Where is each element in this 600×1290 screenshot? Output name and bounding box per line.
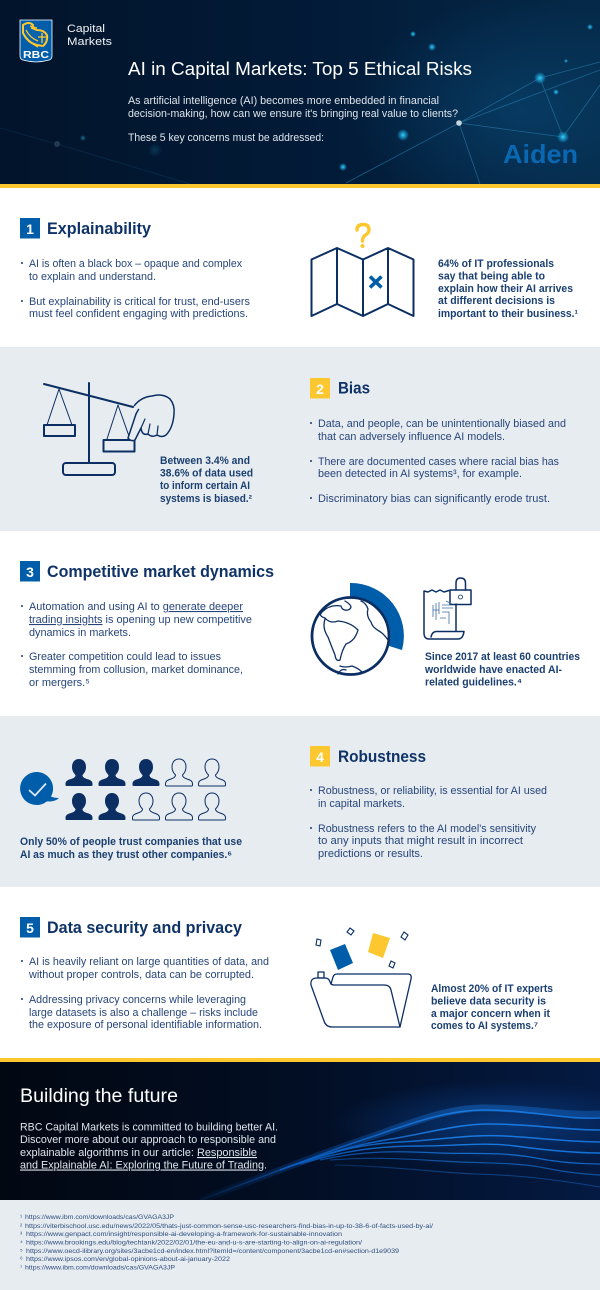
- bullets: competitive dynamics: [21, 601, 252, 689]
- bullets: explainability: must feel confident engaging with predictions.: [29, 308, 248, 320]
- bullets: explainability: AI is often a black box – opaque and complex: [29, 258, 242, 270]
- bullets: competitive dynamics: Automation and using AI to generate deeper: [29, 601, 243, 613]
- wave graphic: [200, 1108, 600, 1200]
- stat: 64%: explain how their AI arrives: [438, 283, 573, 295]
- bullets: data security: large datasets is also a challenge – risks include: [29, 1007, 258, 1019]
- bullets: robustness: Robustness refers to the AI model's sensitivity: [318, 823, 536, 835]
- yellow divider: [0, 184, 600, 188]
- bullets: bias: Data, and people, can be unintentionally biased and: [318, 418, 566, 430]
- footnote list: ⁶: [20, 1256, 23, 1263]
- bullets: robustness: to any inputs that might result in incorrect: [318, 835, 523, 847]
- bullets: robustness: in capital markets.: [318, 798, 405, 810]
- bullets: explainability: to explain and understand.: [29, 271, 156, 283]
- heading: 3 Competitive market dynamics: Competitive market dynamics: [47, 562, 274, 581]
- bullets: data security: without proper controls, data can be corrupted.: [28, 969, 254, 981]
- stat: 50% trust: AI as much as they trust other companies.⁶: [20, 849, 232, 861]
- stat: biased data: Between 3.4% and: [160, 455, 250, 467]
- stat: 64%: important to their business.¹: [438, 308, 578, 320]
- Aiden logo: Aiden: [503, 139, 578, 169]
- icon: globe with arc: [312, 583, 404, 674]
- panel: competitive market dynamics: [0, 531, 600, 716]
- intro text: [128, 95, 458, 144]
- stat: biased data: [160, 455, 253, 505]
- bullets: data security: AI is heavily reliant on large quantities of data, and: [29, 956, 269, 968]
- bullets: competitive dynamics: stemming from collusion, market dominance,: [29, 664, 243, 676]
- heading: 5 Data security and privacy: 5: [26, 920, 34, 936]
- body text with article link: [20, 1122, 278, 1172]
- bullets: bias: Discriminatory bias can significantly erode trust.: [318, 493, 550, 505]
- heading: 4 Robustness: Robustness: [338, 747, 426, 766]
- panel: data security and privacy: [0, 887, 600, 1058]
- icon: scales with hand: [44, 383, 174, 475]
- bullets: bias: [310, 418, 566, 505]
- footnote list: ⁷: [20, 1264, 23, 1272]
- icon: document with lock: [424, 578, 471, 639]
- body text with article link: explainable algorithms in our article: Responsible: [20, 1147, 257, 1159]
- footnote list: https://www.ibm.com/downloads/cas/GVAGA3JP: [25, 1264, 175, 1272]
- intro text: decision-making, how can we ensure it's bringing real value to clients?: [128, 108, 458, 120]
- intro text: These 5 key concerns must be addressed:: [128, 132, 324, 144]
- stat: biased data: 38.6% of data used: [160, 468, 253, 480]
- logo wordmark: Capital: [67, 23, 105, 35]
- network background: [0, 24, 600, 184]
- icon: map with question mark: [312, 224, 414, 316]
- body text with article link: Discover more about our approach to responsible and: [20, 1134, 276, 1146]
- stat: 50% trust: [20, 836, 242, 861]
- stat: 60 countries: Since 2017 at least 60 countries: [425, 651, 580, 663]
- icon: people trust chart: [66, 759, 226, 820]
- stat: 64%: say that being able to: [438, 270, 546, 282]
- footnote list: [20, 1214, 433, 1272]
- heading: 2 Bias: 2: [316, 381, 324, 397]
- stat: 64%: at different decisions is: [438, 295, 555, 307]
- heading: 4 Robustness: 4: [316, 749, 324, 765]
- bullets: bias: been detected in AI systems³, for example.: [318, 468, 522, 480]
- intro text: As artificial intelligence (AI) becomes more embedded in financial: [128, 95, 439, 107]
- heading: 3 Competitive market dynamics: 3: [26, 564, 34, 580]
- heading: 2 Bias: Bias: [338, 378, 370, 398]
- body text with article link: and Explainable AI: Exploring the Future of Trading.: [20, 1160, 267, 1172]
- bullets: data security: Addressing privacy concerns while leveraging: [29, 994, 246, 1006]
- stat: 60 countries: worldwide have enacted AI-: [424, 664, 562, 676]
- stat: 60 countries: related guidelines.⁴: [425, 676, 522, 688]
- panel: explainability: [0, 188, 600, 347]
- heading: 1 Explainability: Explainability: [47, 219, 152, 238]
- icon: speech bubble with check: [20, 772, 59, 805]
- bullets: competitive dynamics: Greater competition could lead to issues: [29, 651, 221, 663]
- bullets: bias: There are documented cases where racial bias has: [318, 456, 559, 468]
- bullets: robustness: [310, 785, 547, 860]
- panel: bias: [0, 347, 600, 531]
- panel: robustness: [0, 716, 600, 887]
- bullets: data security: the exposure of personal identifiable information.: [29, 1019, 262, 1031]
- body text with article link: RBC Capital Markets is committed to building better AI.: [20, 1122, 278, 1134]
- footnote list: ⁵: [20, 1248, 23, 1255]
- footnote list: https://www.oecd-ilibrary.org/sites/3acbe1cd-en/index.html?itemId=/content/component/3acbe1cd-en#section-d1e9039: [26, 1248, 399, 1255]
- footnote list: https://www.ipsos.com/en/global-opinions-about-ai-january-2022: [26, 1256, 230, 1263]
- logo wordmark: [67, 23, 113, 48]
- bullets: competitive dynamics: dynamics in markets.: [29, 627, 131, 639]
- heading: 5 Data security and privacy: Data security and privacy: [47, 918, 243, 937]
- footnote list: ⁴: [20, 1240, 23, 1246]
- heading: 4 Robustness: [310, 746, 426, 766]
- bullets: bias: that can adversely influence AI models.: [318, 431, 505, 443]
- stat: 20% of IT experts: believe data security is: [431, 996, 546, 1008]
- stat: 20% of IT experts: [431, 983, 553, 1032]
- footnote list: https://viterbischool.usc.edu/news/2022/05/thats-just-common-sense-usc-researchers-find-bias-in-up-to-38-6-of-facts-used-by-ai/: [25, 1223, 433, 1230]
- bullets: explainability: [21, 258, 250, 320]
- bullets: competitive dynamics: trading insights is opening up new competitive: [29, 614, 252, 626]
- panel: references: [0, 1200, 600, 1290]
- stat: 60 countries: [424, 651, 580, 688]
- stat: biased data: to inform certain AI: [160, 480, 250, 492]
- heading: Building the future: [20, 1085, 178, 1107]
- footnote list: ³: [20, 1231, 23, 1238]
- RBC logo shield: RBC: [23, 49, 49, 61]
- stat: biased data: systems is biased.²: [160, 493, 252, 505]
- RBC logo shield: [20, 20, 52, 62]
- stat: 20% of IT experts: Almost 20% of IT experts: [431, 983, 553, 995]
- stat: 64%: [438, 258, 578, 320]
- icon: folder with files: [311, 928, 411, 1027]
- bullets: robustness: Robustness, or reliability, is essential for AI used: [318, 785, 547, 797]
- logo wordmark: Markets: [67, 36, 113, 48]
- bullets: explainability: But explainability is critical for trust, end-users: [29, 296, 250, 308]
- footnote list: https://www.genpact.com/insight/responsible-ai-developing-a-framework-for-sustainable-innovation: [26, 1231, 342, 1238]
- title: AI in Capital Markets: Top 5 Ethical Risks: [128, 58, 472, 79]
- footnote list: https://www.ibm.com/downloads/cas/GVAGA3JP: [25, 1214, 174, 1221]
- bullets: data security: [21, 956, 269, 1031]
- heading: 1 Explainability: 1: [26, 221, 34, 237]
- stat: 64%: 64% of IT professionals: [438, 258, 554, 270]
- stat: 50% trust: Only 50% of people trust companies that use: [20, 836, 242, 848]
- footnote list: https://www.brookings.edu/blog/techtank/2022/02/01/the-eu-and-u-s-are-starting-to-align-on-ai-regulation/: [26, 1240, 362, 1246]
- panel: building the future: [0, 1062, 600, 1200]
- heading: 2 Bias: [310, 378, 370, 398]
- stat: 20% of IT experts: a major concern when it: [431, 1008, 550, 1020]
- footnote list: ²: [20, 1223, 23, 1230]
- stat: 20% of IT experts: comes to AI systems.⁷: [431, 1020, 538, 1032]
- footnote list: ¹: [20, 1214, 23, 1221]
- yellow divider: [0, 1058, 600, 1062]
- bullets: competitive dynamics: or mergers.⁵: [29, 677, 90, 689]
- bullets: robustness: predictions or results.: [318, 848, 423, 860]
- header panel: [0, 0, 600, 220]
